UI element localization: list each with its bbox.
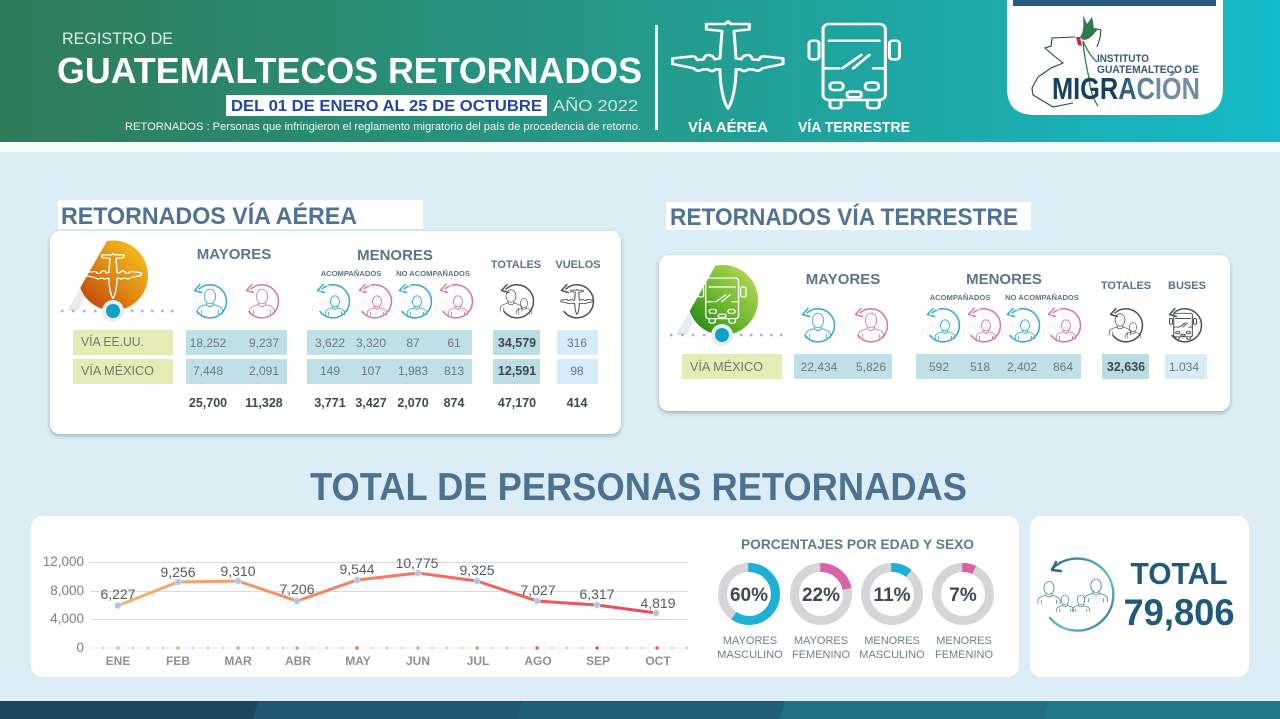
row labels: VÍA MÉXICO	[81, 363, 154, 378]
donut: menores femenino 7%: MENORES	[936, 635, 992, 647]
table: vuelos values: 414	[567, 396, 587, 410]
header banner	[0, 0, 1280, 152]
table: menores values	[307, 330, 472, 410]
icon: plane, vía aérea	[673, 21, 783, 136]
icons: mayores masculino, femenino	[802, 308, 887, 342]
header: year: AÑO 2022	[553, 98, 638, 115]
donut: menores masculino 11%	[859, 568, 925, 661]
table: menores values: 2,070	[397, 396, 429, 410]
heading: menores: NO ACOMPAÑADOS	[1005, 293, 1079, 302]
line chart: returned persons per month: ABR	[285, 654, 311, 668]
table: menores values: 3,320	[356, 336, 386, 350]
table: menores values: 813	[444, 364, 464, 378]
table: menores values: 864	[1053, 360, 1073, 374]
line chart: returned persons per month: 6,317	[579, 586, 615, 602]
heading: total de personas retornadas: TOTAL DE PERSONAS RETORNADAS	[310, 466, 967, 509]
donut: mayores masculino 60%	[717, 568, 783, 661]
table: menores values: 2,402	[1007, 360, 1037, 374]
badge: bus on green circle	[670, 265, 782, 346]
table: menores values: 61	[447, 336, 461, 350]
line chart: returned persons per month: 12,000	[43, 554, 84, 569]
donut: menores femenino 7%	[935, 568, 993, 661]
line chart: returned persons per month: 7,027	[520, 582, 556, 598]
header: definition: RETORNADOS : Personas que infringieron el reglamento migratorio del país de procedencia de retorno.	[125, 121, 641, 133]
icons: menores	[922, 308, 1080, 342]
heading: mayores: MAYORES	[197, 246, 271, 263]
table: menores values: 149	[320, 364, 340, 378]
table: vuelos values: 316	[567, 336, 587, 350]
logo: Instituto Guatemalteco de Migración	[1007, 0, 1223, 115]
line chart: returned persons per month: 9,256	[160, 564, 196, 580]
icon: totales	[1109, 308, 1142, 342]
table: totales values: 12,591	[498, 364, 536, 378]
panel: monthly chart and percentages	[31, 516, 1019, 677]
table: menores values: 3,622	[315, 336, 345, 350]
table: menores values: 1,983	[398, 364, 428, 378]
line chart: returned persons per month: JUN	[406, 654, 430, 668]
icon: plane, vía aérea: VÍA AÉREA	[688, 119, 768, 136]
heading: mayores: MAYORES	[806, 271, 880, 288]
table: mayores values: 18,252	[190, 336, 227, 350]
donut: menores femenino 7%: FEMENINO	[935, 649, 993, 661]
icon: vuelos	[561, 284, 593, 318]
line chart: returned persons per month	[43, 554, 688, 668]
line chart: returned persons per month: 8,000	[50, 583, 84, 598]
line chart: returned persons per month: 9,325	[459, 562, 495, 578]
table: menores values: 3,427	[355, 396, 387, 410]
table: menores values: 3,771	[314, 396, 346, 410]
icon: group of people with return arrow	[1038, 559, 1113, 631]
heading: menores: ACOMPAÑADOS	[321, 269, 381, 278]
table: vuelos values: 98	[570, 364, 584, 378]
donut: menores masculino 11%: 11%	[874, 585, 911, 606]
table: totales value: 32,636	[1107, 360, 1145, 374]
footer band	[0, 701, 1280, 719]
line chart: returned persons per month: 7,206	[279, 581, 315, 597]
table: buses value	[1165, 354, 1207, 379]
icon: bus, vía terrestre	[798, 24, 910, 136]
donut: mayores masculino 60%: MAYORES	[723, 635, 777, 647]
line chart: returned persons per month: MAR	[224, 654, 252, 668]
heading: retornados vía aérea: RETORNADOS VÍA AÉREA	[61, 202, 357, 230]
table: totales values: 47,170	[498, 396, 536, 410]
line chart: returned persons per month: SEP	[586, 654, 610, 668]
logo: Instituto Guatemalteco de Migración: GUATEMALTECO DE	[1097, 64, 1199, 76]
donut: mayores femenino 22%: MAYORES	[794, 635, 848, 647]
icons: menores	[312, 284, 472, 318]
donut: menores femenino 7%: 7%	[949, 585, 977, 606]
donut: menores masculino 11%: MASCULINO	[859, 649, 925, 661]
panel: total	[1030, 516, 1249, 677]
table: menores values: 592	[929, 360, 949, 374]
line chart: returned persons per month: 9,544	[339, 561, 375, 577]
donut: menores masculino 11%: MENORES	[864, 635, 920, 647]
line chart: returned persons per month: OCT	[645, 654, 671, 668]
line chart: returned persons per month: MAY	[345, 654, 371, 668]
panel: retornados vía terrestre	[659, 255, 1230, 411]
heading: buses: BUSES	[1168, 280, 1206, 292]
header: registro de: REGISTRO DE	[62, 29, 173, 48]
table: totales values	[493, 330, 540, 410]
line chart: returned persons per month: JUL	[467, 654, 489, 668]
table: mayores values: 9,237	[249, 336, 279, 350]
line chart: returned persons per month: 6,227	[100, 586, 136, 602]
heading: menores	[321, 247, 470, 278]
logo: Instituto Guatemalteco de Migración: MIGRACIÓN	[1052, 70, 1200, 106]
donut: mayores masculino 60%: MASCULINO	[717, 649, 783, 661]
row label	[682, 354, 782, 379]
table: mayores values: 2,091	[249, 364, 279, 378]
table: mayores values: 7,448	[193, 364, 223, 378]
line chart: returned persons per month: 0	[76, 640, 84, 655]
heading: menores: MENORES	[357, 247, 433, 264]
table: menores values: 107	[361, 364, 381, 378]
table: mayores values: 25,700	[189, 396, 227, 410]
logo: Instituto Guatemalteco de Migración: INSTITUTO	[1097, 53, 1149, 65]
line chart: returned persons per month: 10,775	[396, 555, 439, 571]
table: mayores values: 22,434	[801, 360, 838, 374]
row labels	[73, 330, 173, 384]
header: date range: DEL 01 DE ENERO AL 25 DE OCTUBRE	[231, 98, 542, 115]
donut: mayores femenino 22%: FEMENINO	[792, 649, 850, 661]
icon: buses	[1170, 308, 1201, 342]
total label: TOTAL	[1130, 556, 1228, 591]
heading: retornados vía terrestre: RETORNADOS VÍA TERRESTRE	[670, 203, 1018, 231]
icon: bus, vía terrestre: VÍA TERRESTRE	[798, 119, 910, 136]
line chart: returned persons per month: AGO	[524, 654, 552, 668]
table: mayores values	[186, 330, 287, 410]
table: menores values: 874	[444, 396, 464, 410]
heading: totales: TOTALES	[491, 259, 541, 271]
row label: VÍA MÉXICO	[690, 359, 763, 374]
line chart: returned persons per month: 4,000	[50, 611, 84, 626]
heading: menores: MENORES	[966, 271, 1042, 288]
line chart: returned persons per month: 4,819	[640, 595, 676, 611]
heading: vuelos: VUELOS	[555, 259, 601, 271]
table: vuelos values	[557, 330, 598, 410]
line chart: returned persons per month: ENE	[106, 654, 130, 668]
heading: menores: NO ACOMPAÑADOS	[396, 269, 470, 278]
panel: retornados vía aérea	[50, 231, 621, 434]
table: menores values: 87	[406, 336, 420, 350]
heading: menores	[930, 271, 1079, 302]
table: menores values	[916, 354, 1081, 379]
table: mayores values: 5,826	[856, 360, 886, 374]
donut: mayores femenino 22%: 22%	[802, 585, 840, 606]
line chart: returned persons per month: 9,310	[220, 563, 256, 579]
icon: totales	[500, 284, 533, 318]
line chart: returned persons per month: FEB	[166, 654, 190, 668]
table: mayores values	[794, 354, 892, 379]
badge: plane on orange circle	[61, 232, 174, 322]
heading: porcentajes por edad y sexo: PORCENTAJES POR EDAD Y SEXO	[741, 536, 974, 552]
heading: menores: ACOMPAÑADOS	[930, 293, 990, 302]
table: mayores values: 11,328	[245, 396, 283, 410]
row labels: VÍA EE.UU.	[81, 334, 144, 349]
total value: 79,806	[1124, 592, 1234, 633]
icons: mayores masculino, femenino	[194, 284, 278, 318]
header: main title: GUATEMALTECOS RETORNADOS	[57, 50, 642, 91]
table: totales values: 34,579	[498, 336, 536, 350]
table: totales value	[1102, 354, 1149, 379]
donut: mayores masculino 60%: 60%	[730, 585, 768, 606]
table: buses value: 1.034	[1169, 360, 1199, 374]
table: menores values: 518	[970, 360, 990, 374]
donut: mayores femenino 22%	[792, 568, 850, 661]
heading: totales: TOTALES	[1101, 280, 1151, 292]
